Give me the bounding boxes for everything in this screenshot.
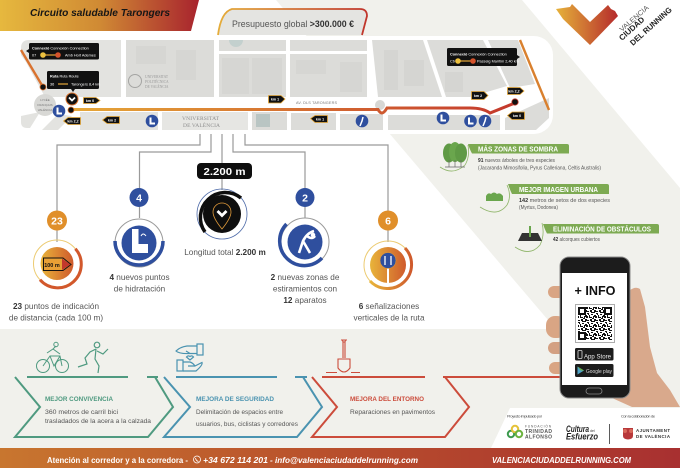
panel: urban image [480, 184, 610, 212]
distance markers: km 1 [316, 118, 324, 122]
map label: universitat de valencia: DE VALÈNCIA [183, 121, 220, 129]
icon: trees [440, 142, 469, 171]
logo: Fundación Trinidad Alfonso: FUNDACIÓN [525, 424, 552, 428]
chevron: convivencia [15, 342, 173, 437]
icon: cyclist [36, 342, 68, 372]
caption: nuevas zonas de [275, 273, 340, 282]
description: usuarios, bus, ciclistas y corredores [196, 421, 299, 428]
caption: nuevos puntos [114, 273, 170, 282]
caption: aparatos [292, 296, 327, 305]
chevron: seguridad [164, 344, 322, 437]
icon: sign post [364, 241, 412, 289]
banner: MEJOR IMAGEN URBANA [519, 187, 598, 194]
caption: de distancia (cada 100 m) [9, 314, 103, 322]
footer website: VALENCIACIUDADDELRUNNING.COM [492, 455, 632, 465]
distance markers: km 0 [86, 99, 94, 103]
caption: 2 [271, 273, 276, 282]
banner [543, 224, 659, 234]
description: Reparaciones en pavimentos [350, 409, 436, 416]
logo: Ajuntament de Valencia: DE VALÈNCIA [636, 434, 671, 439]
distance pill [197, 163, 252, 179]
text: partners: Proyecto impulsado por [507, 414, 543, 418]
callout: connexio left: 07 [32, 54, 36, 58]
button: App Store [575, 348, 614, 360]
footer phone: +34 672 114 201 [203, 456, 269, 465]
route line [21, 40, 549, 113]
icon: runner [78, 342, 108, 373]
logo: Ajuntament de Valencia [609, 424, 671, 444]
heading: + INFO: + INFO [574, 283, 616, 298]
icon: whatsapp [194, 456, 200, 463]
distance markers [64, 88, 524, 124]
button: App Store: App Store [584, 354, 611, 360]
text: (Myrtus, Dodonea) [519, 205, 558, 211]
caption: 4 [109, 273, 114, 282]
footer email: - info@valenciaciudaddelrunning.com [270, 456, 418, 465]
text: 91 nuevos árboles de tres especies [478, 158, 555, 164]
distance markers: km 2 [108, 118, 116, 122]
logo: Ajuntament de Valencia: AJUNTAMENT [636, 428, 670, 433]
text: (Jacaranda Mimosifolia, Pyrus Calleriana, Celtis Australis) [478, 166, 601, 172]
banner [468, 144, 569, 154]
blue map icons [53, 105, 491, 127]
map label: avenue: AV. DLS TARONGERS [296, 101, 337, 105]
phone [560, 257, 630, 398]
map street blocks [21, 40, 549, 130]
panel: shade [440, 142, 601, 172]
item: distance points [9, 210, 103, 322]
map label: universitat de valencia: VNIVERSITAT [182, 116, 220, 122]
title banner: Circuito saludable Tarongers [30, 7, 170, 19]
text: collaboration: Con la colaboración de [621, 414, 655, 418]
distance markers: km 2 [474, 94, 482, 98]
map pin [66, 93, 78, 105]
text: 142 metros de setos de dos especies [519, 198, 610, 204]
callout: connexio right [447, 48, 520, 66]
caption: señalizaciones [363, 302, 419, 311]
icon: water fountain [115, 219, 163, 267]
callout: ruta: Tarongers 8,4 km [71, 82, 100, 86]
icon: shovel [326, 340, 360, 372]
map label: universitat politecnica: DE VALÈNCIA [145, 84, 169, 89]
heading: MEJOR CONVIVENCIA [45, 396, 113, 403]
caption: de hidratación [114, 284, 166, 294]
caption: Longitud total 2.200 m [184, 248, 266, 257]
banner: MÁS ZONAS DE SOMBRA [478, 144, 558, 154]
bottom partners panel [491, 408, 680, 448]
icon: distance sign: 100 m [44, 263, 60, 269]
map label: universitat politecnica: UNIVERSITAT [145, 75, 169, 79]
logo: Cultura del Esfuerzo: Cultura [566, 424, 589, 434]
callout: ruta: Ruta Ruta Route [50, 74, 79, 78]
logo: Fundación Trinidad Alfonso: ALFONSO [525, 434, 552, 440]
footer bar [0, 448, 680, 468]
icon: hands [176, 344, 203, 371]
map label: universitat politecnica [128, 74, 169, 89]
icon: hedge [480, 185, 510, 212]
item: signage [354, 210, 425, 322]
heading: MEJORA DE SEGURIDAD [196, 396, 274, 403]
callout: connexio right: Connexió Connexión Connection [450, 52, 507, 56]
heading: MEJORA DEL ENTORNO [350, 396, 424, 403]
caption: estiramientos con [273, 284, 338, 294]
badge: 6: 6 [385, 216, 391, 228]
callout: ruta [47, 71, 100, 92]
button: Google play: Google play [586, 369, 612, 375]
logo: Cultura del Esfuerzo [566, 424, 598, 442]
icon: heart pin [197, 189, 247, 239]
callout: connexio left [26, 43, 99, 60]
distance pill: 2.200 m [204, 167, 246, 178]
logo: Cultura del Esfuerzo: Esfuerzo [566, 432, 598, 442]
budget box [218, 9, 367, 35]
caption: 6 [359, 302, 364, 311]
QR code [576, 304, 614, 342]
icon: stretching person [280, 218, 329, 266]
logo: Valencia Ciudad del Running [556, 4, 674, 47]
logo: Cultura del Esfuerzo: del [590, 429, 595, 433]
map label: universitat de valencia [182, 116, 220, 129]
map label: universitat politecnica: POLITÈCNICA [145, 79, 169, 84]
badge: 4: 4 [136, 192, 142, 204]
map label: roundabout: VALÈNCIA [38, 107, 52, 112]
item: stretching [271, 188, 340, 305]
footer contact text: Atención al corredor y a la corredora - [47, 456, 188, 465]
item: total length [184, 189, 266, 257]
callout: connexio left: Amb Hort Ademes [65, 54, 96, 58]
callout: ruta: 36 [50, 82, 54, 86]
map label: roundabout [34, 94, 56, 116]
distance markers: km 2,2 [508, 90, 520, 94]
caption: puntos de indicación [22, 302, 99, 311]
logo: Fundación Trinidad Alfonso [508, 424, 552, 440]
description: Delimitación de espacios entre [196, 409, 283, 416]
badge: 23: 23 [51, 216, 63, 228]
caption: 12 [283, 296, 293, 305]
banner: ELIMINACIÓN DE OBSTÁCULOS [553, 224, 651, 234]
logo: Valencia Ciudad del Running: CIUDAD [617, 15, 647, 42]
hand holding phone [546, 286, 680, 407]
badge: 2: 2 [302, 192, 308, 204]
distance markers: km 2,2 [67, 120, 79, 124]
connector lines [57, 134, 388, 242]
caption: 23 [13, 302, 23, 311]
distance markers: km 1 [271, 98, 279, 102]
chevron: entorno [312, 340, 560, 437]
title banner [0, 0, 199, 31]
callout: connexio left: Connexió Connexión Connection [32, 46, 89, 50]
caption: verticales de la ruta [354, 314, 425, 322]
icon: tree pit [515, 223, 543, 252]
map label: roundabout: FRANÇAIS [37, 103, 53, 107]
panel: obstacles [515, 223, 659, 252]
budget box: Presupuesto global >300.000 € [232, 19, 354, 29]
description: trasladados de la acera a la calzada [45, 418, 151, 425]
item: hydration [109, 188, 170, 294]
text: 42 alcorques cubiertos [553, 237, 600, 243]
logo: Valencia Ciudad del Running: VALENCIA [619, 4, 651, 34]
callout: connexio right: Cb [450, 60, 455, 64]
logo: Valencia Ciudad del Running: DEL RUNNING [628, 5, 674, 47]
distance markers: km 0 [513, 114, 521, 118]
logo: Fundación Trinidad Alfonso: TRINIDAD [525, 429, 552, 435]
panel: route map [18, 36, 553, 134]
description: 360 metros de carril bici [45, 409, 119, 416]
callout: connexio right: Passeig Marítim 2,40 km [477, 60, 519, 64]
map label: roundabout: LYCÉE [40, 97, 50, 102]
button: Google play [575, 364, 614, 377]
route end dots [40, 84, 518, 113]
